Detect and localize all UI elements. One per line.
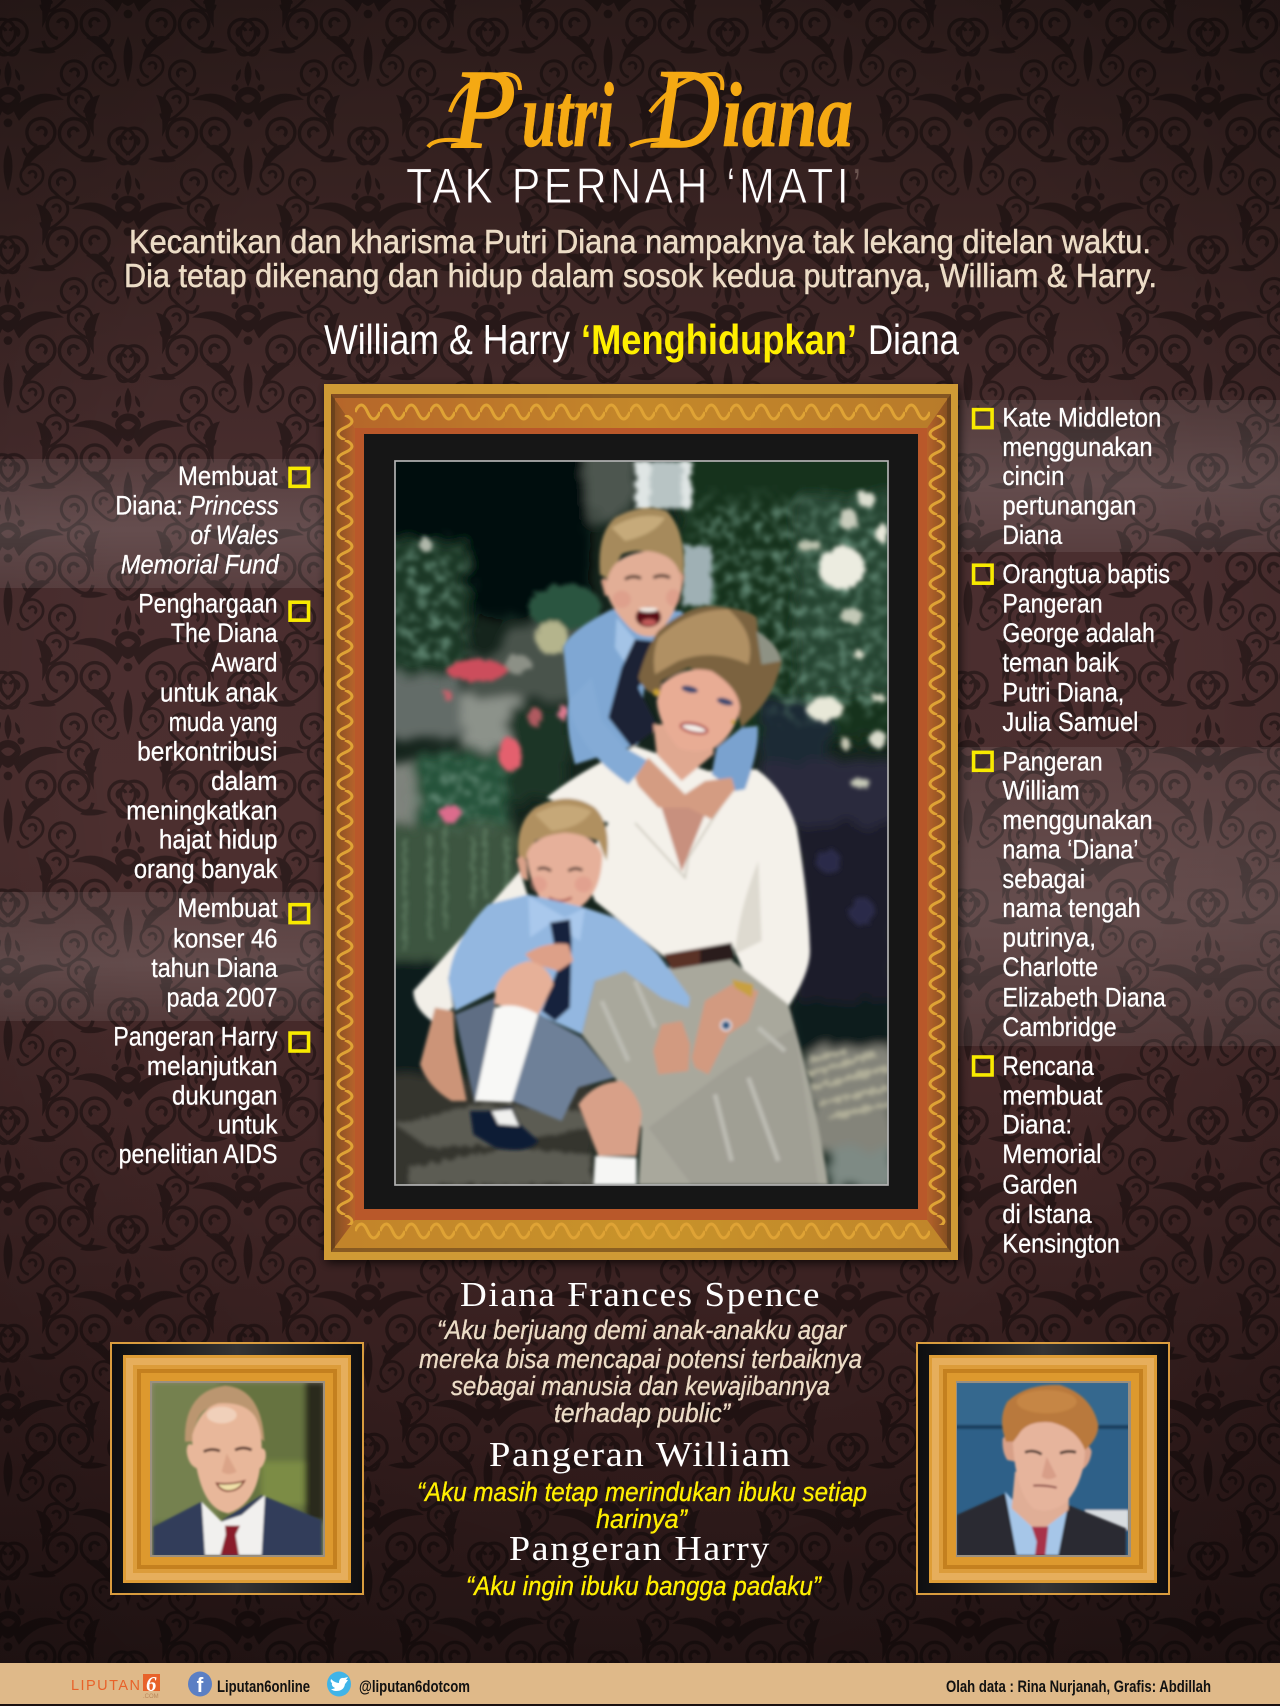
right column list: George adalah <box>1002 618 1155 648</box>
subtitle: Tak Pernah 'Mati': TAK PERNAH ‘MATI’ <box>406 158 865 214</box>
right column list: Diana <box>1002 520 1062 550</box>
left column list: dukungan <box>172 1080 278 1110</box>
intro text block <box>124 223 1157 294</box>
right column list: teman baik <box>1002 647 1119 677</box>
quote block: Pangeran Harry <box>466 1529 822 1601</box>
left column list: Membuat <box>178 461 278 491</box>
left column list: The Diana <box>171 618 278 648</box>
Diana hands <box>692 984 758 1074</box>
quote block: Diana Frances Spence: “Aku berjuang demi anak-anakku agar <box>437 1315 847 1345</box>
quote block: Pangeran William <box>417 1435 867 1534</box>
left column list: Award <box>211 647 278 677</box>
left column list: hajat hidup <box>159 825 278 855</box>
right column list: Putri Diana, <box>1002 678 1124 708</box>
William torso <box>563 609 688 764</box>
left column list: tahun Diana <box>151 953 278 983</box>
footer bar <box>0 1663 1280 1706</box>
right column list: Elizabeth Diana <box>1002 982 1166 1012</box>
right column list: Memorial <box>1002 1139 1101 1169</box>
William arms and hands <box>712 726 758 791</box>
left column list <box>113 461 309 1169</box>
right column list: sebagai <box>1002 864 1085 894</box>
portrait: Prince Harry in gold frame <box>916 1342 1170 1595</box>
section heading: William & Harry <box>324 316 570 363</box>
left column list: melanjutkan <box>147 1051 278 1081</box>
left column list: Pangeran Harry <box>113 1022 278 1052</box>
skirt and belt <box>582 958 828 1185</box>
left column list: dalam <box>211 766 278 796</box>
quote block: Diana Frances Spence <box>419 1275 862 1428</box>
section heading: Diana <box>868 316 960 363</box>
section heading <box>324 316 960 363</box>
right column list: menggunakan <box>1002 432 1153 462</box>
title: Putri Diana: iana <box>722 64 853 166</box>
twitter handle: @liputan6dotcom <box>359 1677 470 1696</box>
logo: Liputan6: 6 <box>146 1672 157 1696</box>
Harry head <box>518 798 608 861</box>
right column list: Rencana <box>1002 1051 1094 1081</box>
logo: Liputan6 <box>71 1672 160 1700</box>
left column list: meningkatkan <box>126 795 278 825</box>
Diana neck, hair, face <box>653 724 715 781</box>
photo: Diana with William and Harry <box>382 448 902 1191</box>
right column list: nama tengah <box>1002 893 1141 923</box>
right column list: Kensington <box>1002 1228 1120 1258</box>
icon: facebook <box>188 1672 212 1697</box>
main ornate frame <box>324 384 958 1260</box>
left column list: konser 46 <box>173 924 278 954</box>
William head <box>599 508 684 579</box>
Harry shirt <box>448 894 690 1034</box>
quote block: Diana Frances Spence: Diana Frances Spence <box>460 1275 821 1314</box>
left column list: untuk anak <box>160 678 278 708</box>
title: Putri Diana: P <box>451 47 516 172</box>
quote block: Pangeran Harry: “Aku ingin ibuku bangga padaku” <box>466 1571 822 1601</box>
quote block: Diana Frances Spence: sebagai manusia dan kewajibannya <box>451 1371 830 1401</box>
right column list: putrinya, <box>1002 923 1096 953</box>
left column list: pada 2007 <box>167 982 278 1012</box>
left column list: Membuat <box>177 893 278 923</box>
intro text block: Dia tetap dikenang dan hidup dalam sosok kedua putranya, William & Harry. <box>124 257 1157 294</box>
quote block: Diana Frances Spence: terhadap public” <box>554 1398 731 1428</box>
panel: translucent side bands <box>0 400 1280 1046</box>
right column list <box>974 403 1170 1258</box>
right column list: cincin <box>1002 461 1064 491</box>
right column list: William <box>1002 776 1080 806</box>
right column list: membuat <box>1002 1080 1103 1110</box>
portrait: Prince William in gold frame <box>110 1342 364 1595</box>
left column list: Penghargaan <box>138 589 278 619</box>
Diana blouse <box>413 871 528 1021</box>
title: Putri Diana: utri <box>522 64 614 166</box>
left column list: penelitian AIDS <box>119 1139 278 1169</box>
right column list: di Istana <box>1002 1199 1092 1229</box>
logo: Liputan6: .COM <box>143 1694 159 1700</box>
logo: Liputan6: LIPUTAN <box>71 1678 140 1694</box>
right column list: Kate Middleton <box>1002 403 1161 432</box>
quote block: Diana Frances Spence: mereka bisa mencapai potensi terbaiknya <box>419 1344 862 1374</box>
quote block: Pangeran William: Pangeran William <box>489 1435 792 1474</box>
right column list: Diana: <box>1002 1110 1072 1140</box>
title: Putri Diana: D <box>650 47 720 172</box>
quote block: Pangeran William: “Aku masih tetap merindukan ibuku setiap <box>417 1477 867 1507</box>
left column list: untuk <box>218 1110 278 1140</box>
right column list: menggunakan <box>1002 805 1153 835</box>
quote block: Pangeran William: harinya” <box>596 1504 688 1534</box>
checkboxes: right list <box>974 410 992 1075</box>
checkboxes: left list <box>290 468 309 1051</box>
left column list: orang banyak <box>134 854 278 884</box>
credits: Olah data : Rina Nurjanah, Grafis: Abdillah <box>946 1677 1211 1696</box>
section heading: ‘Menghidupkan’ <box>581 316 857 363</box>
icon: twitter <box>327 1672 351 1696</box>
quote block: Pangeran Harry: Pangeran Harry <box>509 1529 771 1568</box>
right column list: pertunangan <box>1002 491 1136 521</box>
left column list: muda yang <box>169 707 278 737</box>
left column list: Diana: Princess <box>115 491 279 521</box>
right column list: Pangeran <box>1002 589 1103 619</box>
right column list: Cambridge <box>1002 1012 1117 1042</box>
left column list: berkontribusi <box>137 737 278 767</box>
right column list: nama ‘Diana’ <box>1002 834 1138 864</box>
right column list: Garden <box>1002 1170 1078 1200</box>
facebook handle: Liputan6online <box>217 1677 310 1696</box>
intro text block: Kecantikan dan kharisma Putri Diana nampaknya tak lekang ditelan waktu. <box>129 223 1151 260</box>
right column list: Charlotte <box>1002 952 1098 982</box>
right column list: Julia Samuel <box>1002 707 1138 737</box>
title: Putri Diana <box>428 47 853 172</box>
icon: facebook: f <box>197 1675 204 1697</box>
right column list: Orangtua baptis <box>1002 559 1170 589</box>
left column list: of Wales <box>190 520 279 550</box>
right column list: Pangeran <box>1002 746 1103 776</box>
Harry shorts and legs <box>455 998 495 1104</box>
left column list: Memorial Fund <box>121 549 280 579</box>
